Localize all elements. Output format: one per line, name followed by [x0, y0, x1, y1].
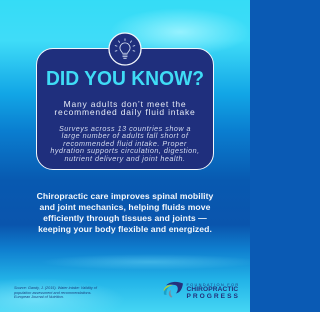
- text block: survey details: Surveys across 13 countries show a: [59, 124, 191, 132]
- subheading: fluid intake: recommended daily fluid intake: [54, 107, 196, 117]
- text block: survey details: large number of adults fall short of: [62, 131, 188, 140]
- text block: survey details: hydration supports circulation, digestion,: [50, 146, 200, 155]
- source citation: European Journal of Nutrition.: [14, 295, 64, 299]
- source citation: Source: Gandy, J. (2015). Water intake: Validity of: [14, 286, 97, 290]
- background: blue water gradient: [0, 0, 250, 312]
- subheading: fluid intake: [54, 98, 196, 117]
- logo word: chiropractic: CHIROPRACTIC: [186, 286, 238, 292]
- text block: survey details: [50, 124, 200, 162]
- text block: chiropractic care message: [37, 190, 214, 234]
- text block: survey details: nutrient delivery and joint health.: [64, 154, 186, 162]
- source citation: population assessment and recommendations.: [14, 291, 92, 295]
- logo mark: [164, 282, 183, 298]
- panel: did you know card: [36, 48, 214, 170]
- subheading: fluid intake: Many adults don’t meet the: [64, 98, 186, 108]
- heading: did you know: DID YOU KNOW?: [46, 66, 204, 90]
- text block: chiropractic care message: and joint mechanics, helping fluids move: [40, 202, 210, 212]
- icon: light bulb badge: [108, 32, 142, 66]
- logo word: progress: PROGRESS: [186, 292, 240, 300]
- text block: chiropractic care message: keeping your body flexible and energized.: [38, 224, 212, 234]
- logo wordmark: FOUNDATION FOR: [186, 282, 239, 286]
- text block: survey details: recommended fluid intake. Proper: [63, 138, 187, 148]
- source citation: [14, 286, 98, 299]
- text block: chiropractic care message: efficiently through tissues and joints —: [43, 213, 207, 223]
- text block: chiropractic care message: Chiropractic care improves spinal mobility: [37, 190, 213, 200]
- logo: foundation for chiropractic progress: [164, 282, 239, 298]
